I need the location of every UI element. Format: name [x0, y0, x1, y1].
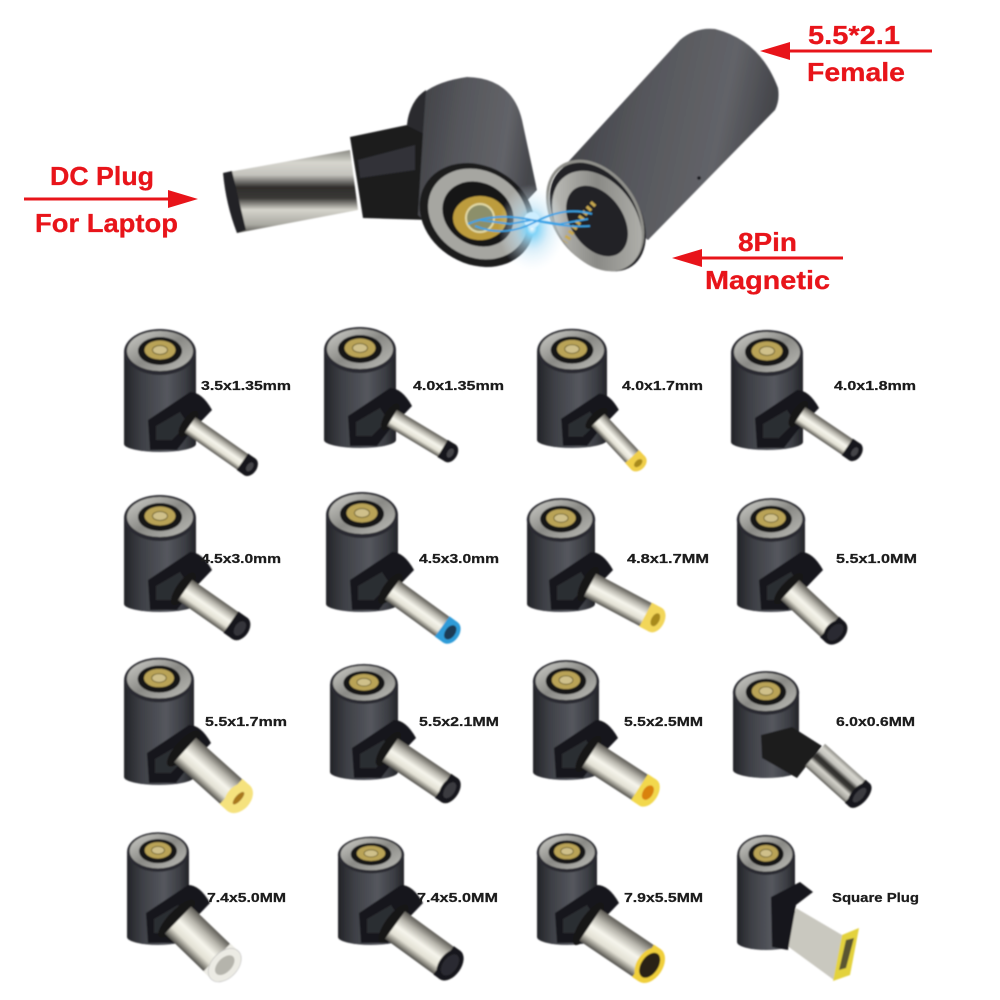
- plug 4.0x1.7mm: [537, 329, 653, 478]
- size labels: Square Plug: [832, 891, 919, 905]
- plug 4.0x1.8mm: [731, 330, 869, 468]
- hero plug shaft: [223, 150, 358, 233]
- hero left body: [407, 77, 537, 262]
- label: DC Plug For Laptop: DC Plug: [50, 161, 154, 191]
- size labels: [201, 379, 919, 905]
- plug 7.9x5.5MM: [537, 834, 674, 993]
- plug 6.0x0.6MM: [733, 671, 876, 812]
- label: 5.5*2.1 Female: Female: [807, 57, 905, 87]
- hero right face: [528, 143, 666, 290]
- size labels: 3.5x1.35mm: [201, 379, 291, 393]
- hero right body: [558, 29, 779, 240]
- plug 4.5x3.0mm blue: [326, 492, 468, 652]
- hero spark: [468, 184, 592, 272]
- plug 5.5x1.7mm: [124, 658, 263, 823]
- label: 8Pin Magnetic: [672, 227, 843, 295]
- plug 5.5x1.0MM: [737, 498, 856, 654]
- label: DC Plug For Laptop: For Laptop: [35, 208, 178, 238]
- size labels: 4.0x1.35mm: [413, 379, 504, 393]
- size labels: 4.5x3.0mm: [201, 552, 281, 566]
- size labels: 4.8x1.7MM: [627, 552, 709, 566]
- size labels: 5.5x1.0MM: [836, 552, 917, 566]
- label: DC Plug For Laptop: [24, 161, 198, 238]
- plug 3.5x1.35mm: [124, 329, 264, 483]
- label: 5.5*2.1 Female: [760, 20, 932, 87]
- hero photo: DC plug adapter: [223, 77, 553, 287]
- plug 7.4x5.0MM black: [338, 837, 472, 990]
- size labels: 5.5x2.1MM: [419, 715, 499, 729]
- plug 5.5x2.1MM: [330, 664, 468, 812]
- hero pins: [565, 203, 594, 242]
- size labels: 4.0x1.7mm: [622, 379, 703, 393]
- label: 8Pin Magnetic: Magnetic: [705, 265, 830, 295]
- size labels: 7.4x5.0MM: [417, 891, 498, 905]
- plug 4.0x1.35mm: [324, 327, 464, 469]
- size labels: 5.5x2.5MM: [624, 715, 703, 729]
- hero photo: female adapter: [528, 29, 779, 290]
- label: 8Pin Magnetic: 8Pin: [738, 227, 797, 257]
- size labels: 4.0x1.8mm: [834, 379, 916, 393]
- size labels: 5.5x1.7mm: [205, 715, 287, 729]
- label: 5.5*2.1 Female: 5.5*2.1: [808, 20, 900, 50]
- plug 7.4x5.0MM white: [127, 832, 251, 992]
- size labels: 7.9x5.5MM: [624, 891, 703, 905]
- size labels: 4.5x3.0mm: [419, 552, 499, 566]
- size labels: 6.0x0.6MM: [836, 715, 915, 729]
- plug 4.8x1.7MM: [527, 498, 672, 641]
- plug 5.5x2.5MM: [533, 660, 668, 816]
- plug 4.5x3.0mm black: [124, 495, 258, 649]
- hero collar: [350, 125, 430, 220]
- size labels: 7.4x5.0MM: [207, 891, 286, 905]
- plug square: [737, 835, 859, 981]
- hero left face: [401, 143, 553, 287]
